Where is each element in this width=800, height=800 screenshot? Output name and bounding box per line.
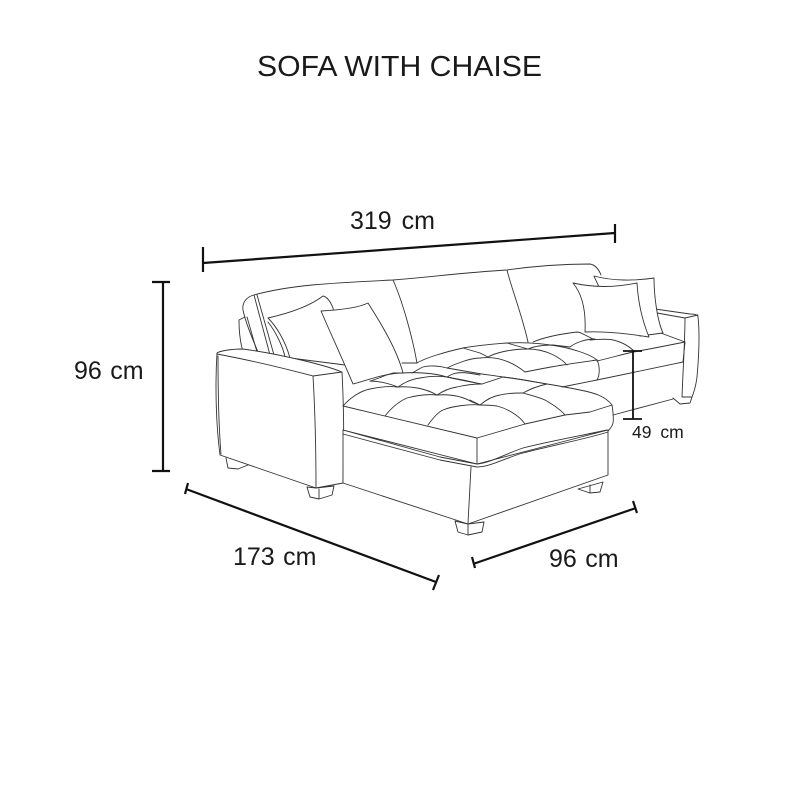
right arm: [655, 309, 699, 404]
chaise top edge: [370, 373, 612, 405]
dimension: width 319 cm: [203, 207, 615, 272]
back left pillow: [268, 296, 345, 365]
left arm: [216, 349, 344, 488]
dimension: depth 173 cm: [185, 483, 439, 590]
chaise cushion front: [343, 405, 613, 438]
sofa line drawing: [216, 264, 699, 535]
dimension: depth 173 cm: 173 cm: [233, 543, 316, 571]
dimension: chaise 96 cm: 96 cm: [549, 545, 619, 573]
chaise base: [343, 430, 608, 524]
dimension: chaise 96 cm: [472, 501, 637, 573]
dimension: width 319 cm: 319 cm: [350, 207, 435, 235]
main seat cushion: [402, 343, 599, 380]
dimension: seat height 49 cm: 49 cm: [632, 422, 684, 442]
right front pillow: [573, 283, 649, 337]
title: SOFA WITH CHAISE: [257, 51, 542, 83]
chaise: [343, 372, 613, 524]
sofa back: [239, 264, 601, 363]
dimension: seat height 49 cm: [623, 351, 684, 442]
main seat: [402, 332, 685, 415]
chaise feet: [455, 482, 603, 535]
dimension: height 96 cm: [74, 282, 170, 471]
dimension: height 96 cm: 96 cm: [74, 357, 144, 385]
chaise tufting: [343, 387, 437, 406]
front left pillow: [321, 303, 403, 384]
right rear pillow: [594, 276, 663, 336]
arm feet: [226, 458, 334, 499]
